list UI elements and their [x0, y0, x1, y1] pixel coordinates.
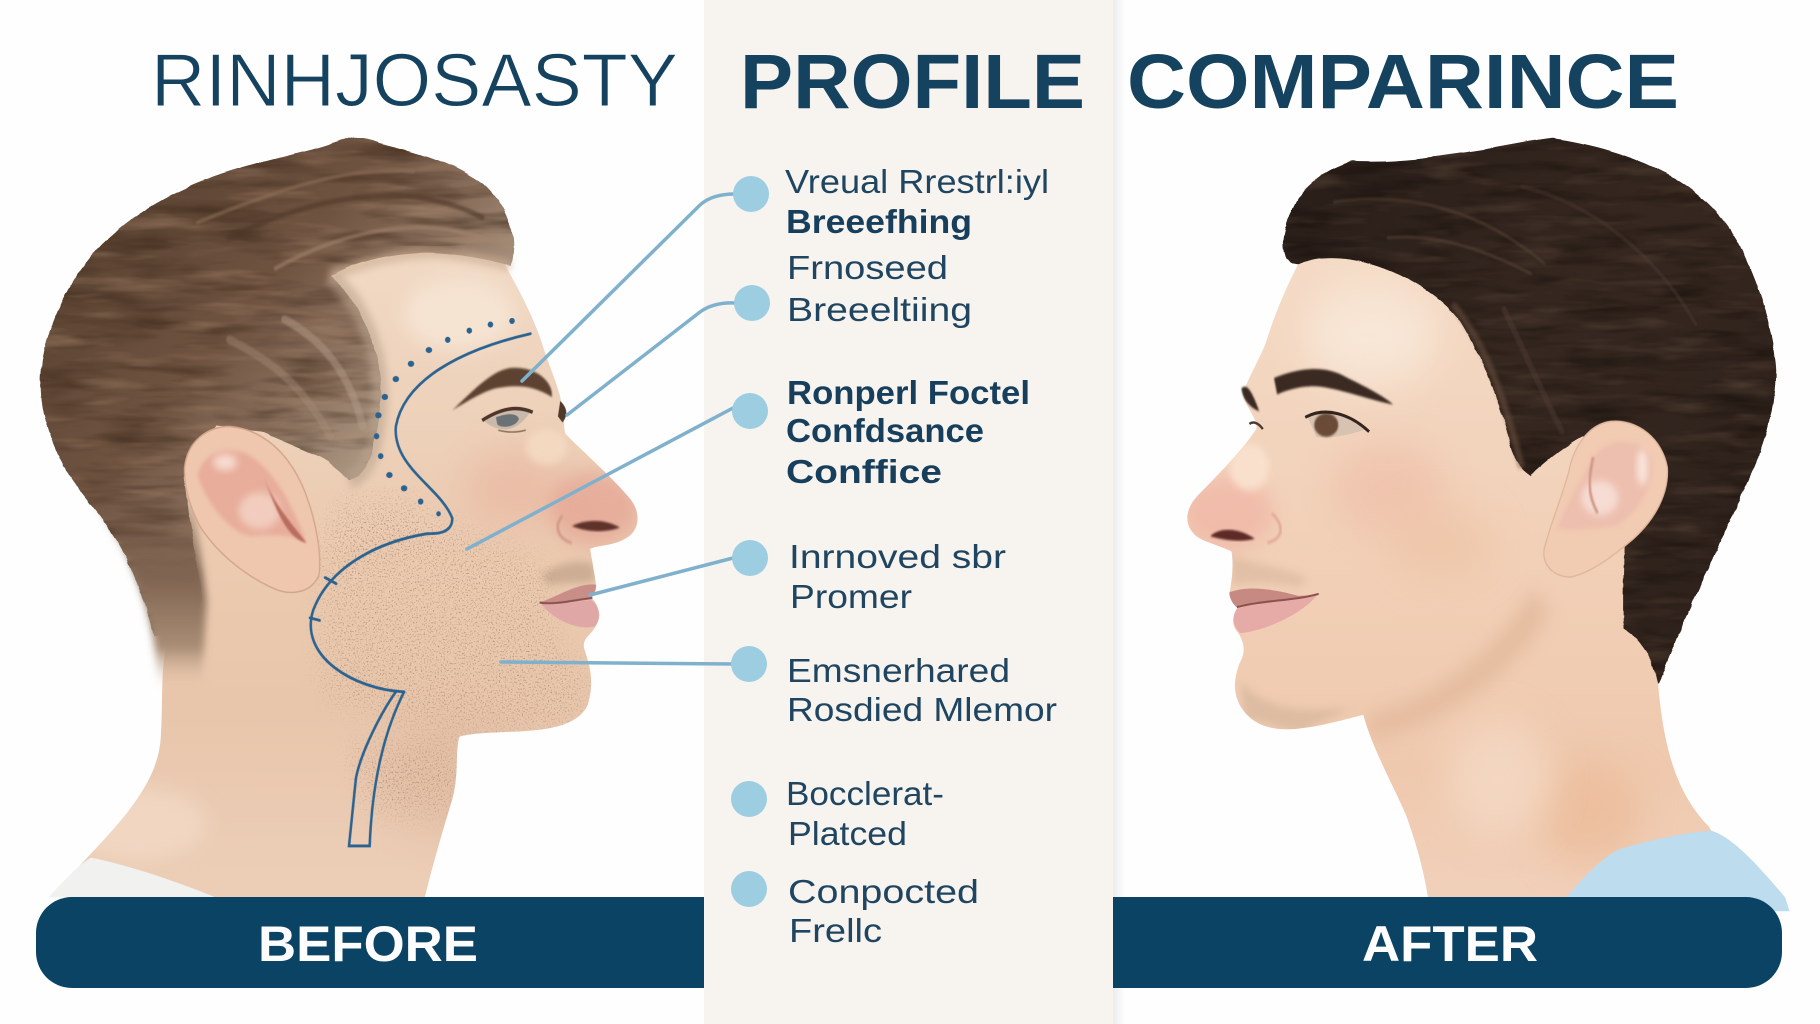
item 5	[787, 652, 1057, 728]
lips	[540, 584, 599, 627]
after label bar	[1113, 897, 1782, 988]
item 1	[785, 163, 1049, 240]
item 3: Ronperl Foctel	[787, 374, 1030, 411]
brow	[452, 368, 552, 410]
ear	[1544, 421, 1667, 577]
item 3: Confdsance	[786, 412, 984, 449]
lips	[1229, 588, 1319, 633]
item 7: Conpocted	[788, 873, 979, 910]
shirt collar	[48, 858, 216, 897]
hair	[1283, 138, 1776, 684]
surgical dotted guide	[374, 318, 515, 516]
item 4	[789, 538, 1006, 615]
brow	[1241, 369, 1393, 411]
title word: Profile: PROFILE	[740, 39, 1085, 125]
item 1: Breeefhing	[786, 203, 972, 240]
head and neck skin	[51, 238, 638, 897]
nose nostril	[1210, 530, 1255, 541]
nose nostril	[572, 521, 620, 531]
benefits list	[785, 163, 1057, 949]
before label bar	[36, 897, 704, 988]
shirt	[1566, 831, 1790, 911]
item 6: Bocclerat-	[786, 775, 944, 812]
title word: Rinhjosasty: RINHJOSASTY	[151, 38, 678, 122]
item 5: Emsnerhared	[787, 652, 1010, 689]
before label bar: BEFORE	[258, 916, 478, 972]
item 4: Promer	[790, 578, 912, 615]
item 7	[788, 873, 979, 949]
item 1: Vreual Rrestrl:iyl	[785, 163, 1049, 200]
after portrait	[1180, 138, 1790, 911]
head and neck skin	[1187, 248, 1745, 897]
callout lines	[467, 194, 735, 664]
item 6: Platced	[788, 815, 907, 852]
eye	[1249, 412, 1369, 437]
title word: Comparince: COMPARINCE	[1127, 39, 1679, 125]
ear	[185, 427, 320, 592]
surgical contour line	[310, 334, 530, 846]
after label bar: AFTER	[1362, 916, 1538, 972]
eye	[482, 409, 533, 432]
item 3	[786, 374, 1030, 490]
item 5: Rosdied Mlemor	[787, 691, 1057, 728]
item 7: Frellc	[789, 912, 882, 949]
item 2	[787, 249, 972, 328]
item 6	[786, 775, 944, 852]
panel: center benefits column	[704, 0, 1125, 1024]
callout markers	[731, 176, 770, 907]
hair	[41, 138, 513, 687]
item 2: Frnoseed	[787, 249, 948, 286]
item 2: Breeeltiing	[787, 291, 972, 328]
item 4: Inrnoved sbr	[789, 538, 1006, 575]
item 3: Conffice	[786, 453, 942, 490]
before portrait	[41, 138, 641, 897]
title	[151, 38, 1679, 125]
